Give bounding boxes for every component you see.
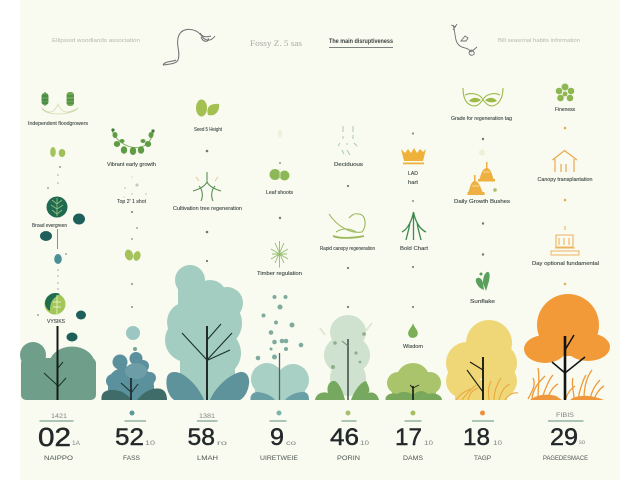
rule bbox=[472, 420, 494, 422]
header date: Fossy Z. 5 sas bbox=[250, 39, 302, 48]
rule bbox=[40, 420, 74, 422]
label: NAIPPO bbox=[44, 455, 73, 462]
dot bbox=[276, 410, 282, 416]
icon: line sprout right bbox=[451, 24, 477, 55]
column 4 milestones bbox=[256, 130, 303, 360]
icon: pair of leaves bbox=[124, 249, 142, 262]
label: Cultivation tree regeneration bbox=[173, 206, 242, 212]
tree 3 bbox=[165, 265, 249, 400]
dot bbox=[412, 132, 414, 135]
stem dotted bbox=[57, 229, 58, 249]
unit: so bbox=[579, 440, 586, 446]
unit: 1A bbox=[72, 441, 80, 447]
column 1 milestones bbox=[28, 92, 88, 342]
icon: swoosh bbox=[329, 214, 365, 238]
icon: leaf garland bbox=[111, 128, 155, 155]
stat 3 bbox=[188, 414, 228, 462]
label: Seed 5 Height bbox=[194, 127, 222, 133]
label: PAGEDESMACE bbox=[543, 455, 589, 462]
label: Fineness bbox=[555, 107, 575, 113]
rule bbox=[548, 420, 584, 422]
label: FASS bbox=[123, 455, 141, 462]
label: hart bbox=[408, 180, 418, 186]
label: Broad evergreen bbox=[32, 223, 67, 229]
unit: 10 bbox=[493, 441, 503, 447]
rule bbox=[124, 420, 146, 422]
dot bbox=[564, 283, 566, 285]
icon: pine tree bbox=[402, 212, 426, 240]
dot bbox=[480, 410, 485, 416]
tree 4 bbox=[250, 353, 309, 400]
stat head: FIBIS bbox=[556, 413, 574, 419]
label: Daily Growth Bushes bbox=[454, 199, 510, 205]
icon: two leaves bbox=[50, 147, 65, 157]
unit: co bbox=[286, 441, 297, 447]
icon: starburst plant bbox=[271, 241, 288, 268]
unit: 10 bbox=[145, 441, 156, 447]
dots bbox=[131, 211, 138, 308]
label: Wisdom bbox=[403, 344, 423, 350]
icon: house outline bbox=[552, 150, 577, 172]
stat 1 bbox=[38, 414, 80, 462]
label: VYSIKS bbox=[47, 319, 65, 325]
dot bbox=[346, 410, 350, 416]
label: Timber regulation bbox=[257, 271, 302, 277]
teal drop bbox=[54, 254, 62, 264]
dots bbox=[482, 222, 484, 256]
faint mark bbox=[479, 150, 485, 156]
unit: ro bbox=[217, 441, 228, 447]
label: Sunflake bbox=[470, 299, 495, 305]
number: 52 bbox=[115, 424, 144, 451]
rule bbox=[270, 420, 286, 422]
stat 2 bbox=[115, 410, 156, 462]
number: 18 bbox=[463, 424, 490, 451]
dot bbox=[564, 127, 566, 129]
unit: 10 bbox=[360, 441, 370, 447]
dots bbox=[279, 162, 281, 219]
rule bbox=[342, 420, 356, 422]
column 6 milestones bbox=[400, 132, 428, 350]
icon: pale sprig bbox=[338, 126, 357, 155]
dot bbox=[482, 138, 484, 140]
rule bbox=[197, 420, 218, 422]
tree 7 bbox=[446, 320, 518, 400]
pale teal circle bbox=[126, 326, 140, 340]
icon: arch sprout bbox=[193, 172, 221, 201]
icon: green sprout bbox=[476, 272, 490, 291]
column 8 milestones bbox=[532, 84, 599, 285]
stat head: 1381 bbox=[199, 414, 216, 420]
number: 9 bbox=[270, 424, 284, 451]
label: Bold Chart bbox=[400, 246, 428, 252]
stat 7 bbox=[463, 410, 503, 462]
label: Day optional fundamental bbox=[532, 261, 599, 267]
icon: round leaf bbox=[46, 196, 68, 218]
stat 5 bbox=[330, 410, 370, 462]
label: Vibrant early growth bbox=[107, 162, 156, 168]
sparse dots bbox=[123, 176, 147, 198]
label: Independent floodgrowers bbox=[28, 121, 88, 127]
tree 5 bbox=[315, 315, 379, 400]
column 5 milestones bbox=[320, 126, 375, 308]
rule bbox=[404, 420, 422, 422]
label: LMAH bbox=[197, 455, 218, 462]
dark dots bbox=[66, 310, 86, 342]
faint mark bbox=[278, 130, 282, 138]
header text right: Bill seasonal habits information bbox=[498, 38, 580, 44]
icon: glasses leaves bbox=[463, 88, 503, 106]
tree 8 bbox=[524, 294, 610, 400]
label: LAD bbox=[408, 171, 418, 177]
label: Rapid canopy regeneration bbox=[320, 246, 375, 252]
stat 6 bbox=[395, 410, 434, 462]
tree 1 bbox=[20, 326, 96, 400]
dot bbox=[206, 231, 208, 233]
label: TAGP bbox=[474, 455, 491, 462]
icon: flower cluster bbox=[556, 84, 574, 101]
column 2 milestones bbox=[107, 128, 156, 351]
label: PORIN bbox=[337, 455, 360, 462]
dot bbox=[412, 200, 414, 202]
dots bbox=[412, 266, 414, 308]
number: 02 bbox=[38, 422, 71, 452]
number: 58 bbox=[188, 424, 215, 451]
dots bbox=[347, 267, 349, 308]
tree 2 bbox=[101, 352, 167, 400]
dark dots bbox=[40, 214, 85, 241]
icon: clover leaf bbox=[270, 168, 290, 180]
tree 6 bbox=[385, 363, 442, 400]
title underline bbox=[329, 46, 393, 49]
dot bbox=[410, 410, 416, 416]
column 3 milestones bbox=[173, 100, 242, 262]
icon: line sprout left bbox=[163, 29, 215, 65]
icon: crown bbox=[401, 148, 426, 164]
header bbox=[52, 24, 580, 65]
icon: stacked bells bbox=[468, 162, 495, 195]
small dot bbox=[133, 347, 137, 351]
stat 4 bbox=[260, 410, 299, 462]
dot bbox=[347, 185, 349, 187]
dots bbox=[37, 166, 67, 316]
header text left: Ellipsoid woodlands association bbox=[52, 38, 140, 44]
floating teal dots bbox=[256, 295, 303, 360]
label: DAMS bbox=[403, 455, 424, 462]
unit: 10 bbox=[424, 441, 434, 447]
dot bbox=[206, 150, 208, 152]
green dot bbox=[493, 188, 497, 192]
dot bbox=[564, 199, 566, 201]
label: Leaf shoots bbox=[266, 190, 293, 196]
stat 8 bbox=[543, 413, 589, 462]
number: 29 bbox=[550, 424, 578, 451]
label: Top 2' 1 shot bbox=[117, 199, 146, 205]
label: Deciduous bbox=[334, 162, 363, 168]
number: 46 bbox=[330, 424, 359, 451]
dot bbox=[130, 410, 134, 416]
header title: The main disruptiveness bbox=[329, 39, 394, 45]
number: 17 bbox=[395, 424, 422, 451]
icon: orange temple bbox=[551, 226, 579, 255]
stat head: 1421 bbox=[51, 414, 68, 420]
label: UIRETWEIE bbox=[260, 455, 299, 462]
icon: green orb bbox=[44, 293, 66, 314]
icon: twin herb bbox=[42, 92, 78, 114]
icon: bud bbox=[408, 323, 418, 338]
label: Grade for regeneration tag bbox=[451, 116, 512, 122]
label: Canopy transplantation bbox=[538, 177, 592, 183]
icon: two leaves large bbox=[196, 100, 219, 116]
column 7 milestones bbox=[451, 88, 512, 305]
dot bbox=[206, 260, 208, 262]
